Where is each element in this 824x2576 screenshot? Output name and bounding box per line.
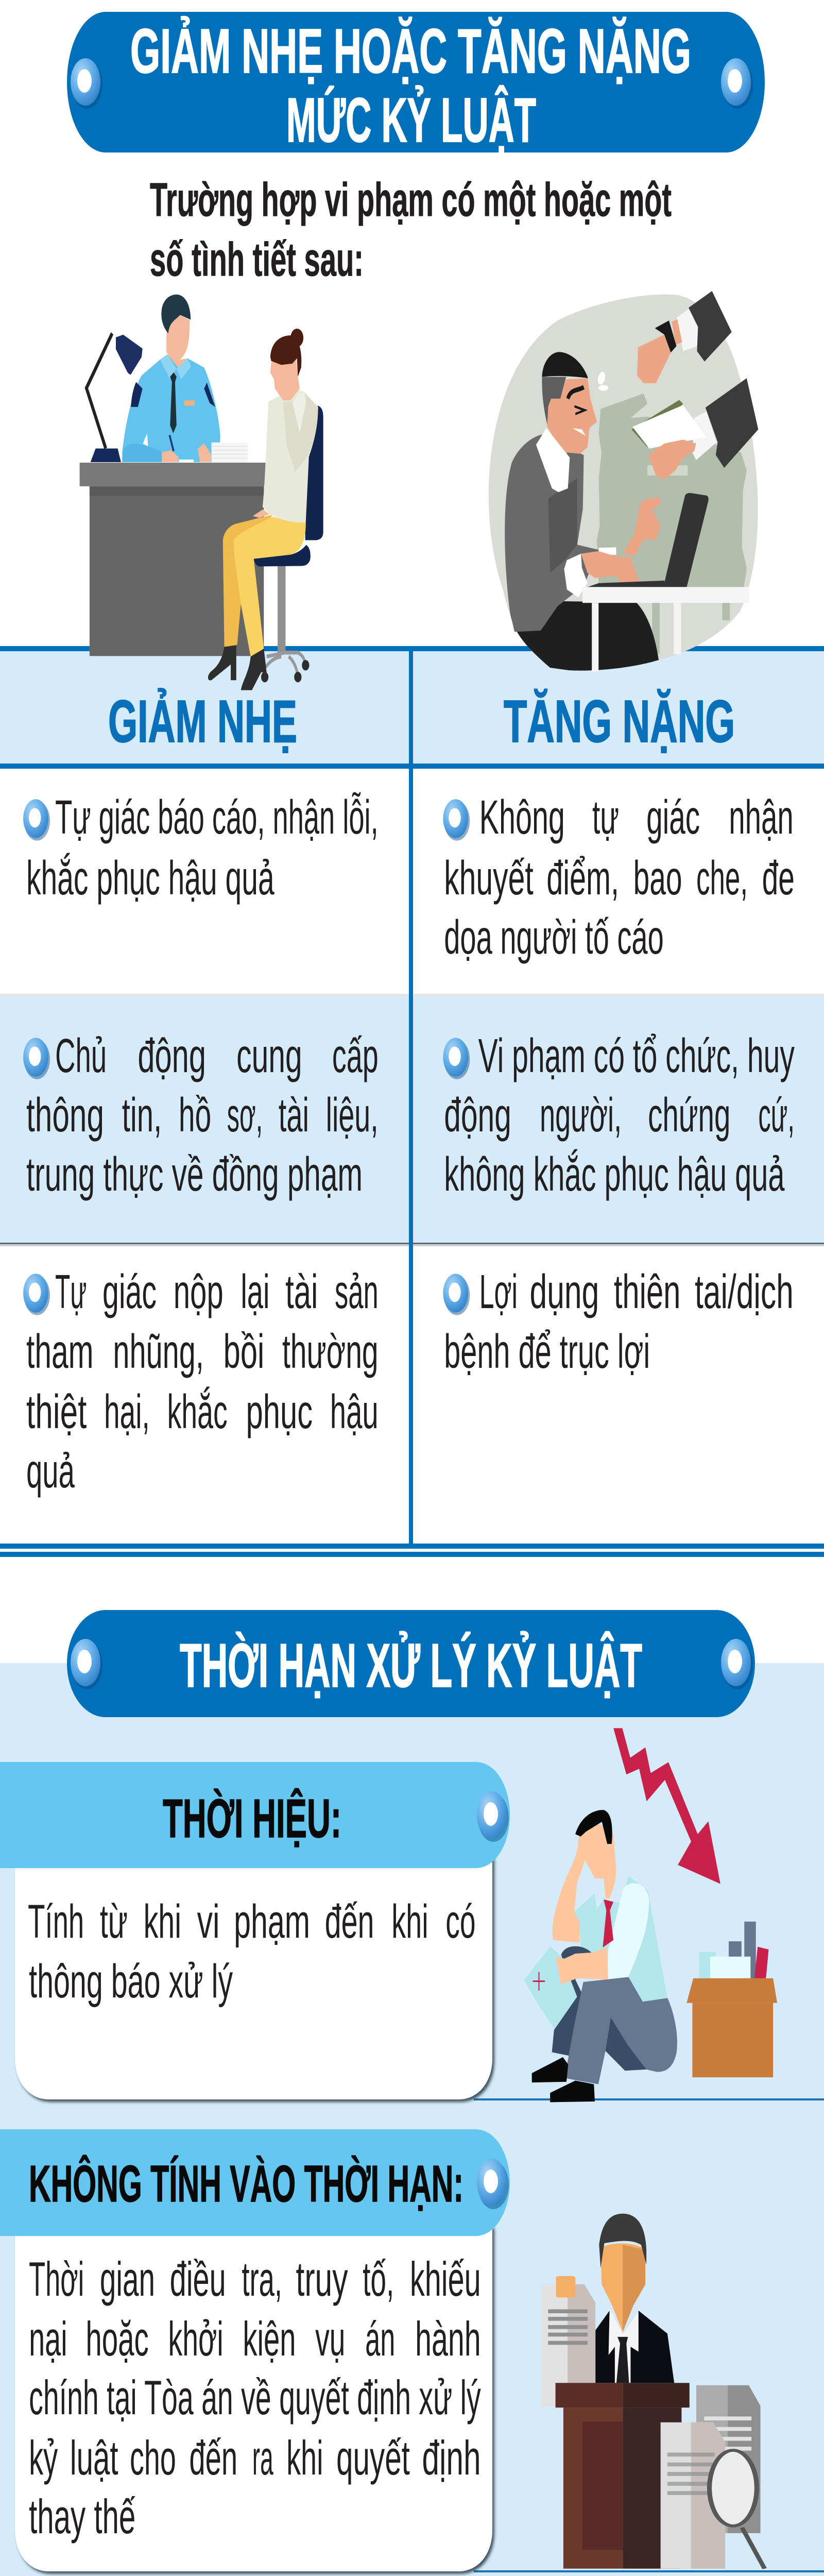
body text [28, 1895, 475, 2008]
cell: tăng nặng 1: Không [479, 790, 565, 844]
laptop [588, 493, 709, 587]
cell: giảm nhẹ 2: động [138, 1029, 206, 1082]
icon: right rivet [721, 58, 753, 109]
cell: giảm nhẹ 3: hại, [104, 1385, 150, 1438]
body text: định [422, 2431, 481, 2485]
body text: hoặc [85, 2312, 149, 2366]
illustration: officer and woman at desk [80, 295, 323, 690]
body text: khởi [168, 2312, 224, 2366]
cell: tăng nặng 2: người, [540, 1088, 622, 1142]
icon: rivet [477, 2159, 509, 2209]
falling arrow [613, 1728, 720, 1884]
intro text: số tình tiết sau: [150, 233, 364, 286]
icon: left rivet [71, 58, 102, 109]
body text: chính tại Tòa án về quyết định xử lý [29, 2371, 481, 2425]
cell: giảm nhẹ 3: nộp [174, 1265, 224, 1318]
background blob [489, 294, 758, 671]
cell: giảm nhẹ 3: hậu [330, 1385, 379, 1438]
cell: giảm nhẹ 3: thường [282, 1325, 379, 1378]
body text: thay thế [29, 2490, 135, 2544]
man [505, 352, 661, 671]
body text: cho [130, 2431, 176, 2485]
woman [208, 329, 318, 690]
cell: giảm nhẹ 2: tài [279, 1088, 309, 1142]
body text: khi [286, 2431, 323, 2485]
magnifier [710, 2450, 765, 2569]
cell: giảm nhẹ 2: thông [26, 1088, 104, 1142]
cell: giảm nhẹ 3: tham [26, 1325, 94, 1378]
cell: tăng nặng 3: bệnh để trục lợi [444, 1325, 650, 1378]
cell: giảm nhẹ 2: hồ [179, 1088, 211, 1142]
front document [661, 2422, 725, 2569]
cell: giảm nhẹ 3: Tự [55, 1265, 87, 1318]
body text: đến [325, 1895, 374, 1948]
body text: kiện [243, 2312, 296, 2366]
paper stack [212, 443, 248, 463]
cell: tăng nặng 1: bao [633, 851, 682, 905]
cell: tăng nặng 2 [443, 1029, 795, 1201]
green brush shape [597, 394, 747, 654]
label bar [0, 1762, 510, 1868]
section background: light blue [0, 1663, 824, 2576]
section 1 title banner [67, 12, 765, 155]
cell: giảm nhẹ 2: trung thực về đồng phạm [26, 1147, 363, 1201]
cell: tăng nặng 2: chứng [648, 1088, 730, 1142]
body text: nại [29, 2312, 67, 2366]
panel: thời hiệu [0, 1762, 510, 2099]
cell: giảm nhẹ 3: phục [246, 1385, 313, 1438]
illustration: stressed man pressured by hands [489, 291, 758, 672]
body text: tra, [242, 2252, 282, 2307]
cell: tăng nặng 1: đe [762, 851, 795, 905]
table cell text [23, 790, 795, 1498]
lamp [87, 333, 143, 462]
icon: left rivet [71, 1639, 102, 1689]
body text: phạm [234, 1895, 310, 1948]
body text: khi [144, 1895, 181, 1948]
cell: giảm nhẹ 1: Tự giác báo cáo, nhận lỗi, [55, 790, 379, 844]
body text: thông báo xử lý [29, 1955, 233, 2008]
cell: giảm nhẹ 3: thiệt [26, 1385, 87, 1438]
body text: điều [170, 2252, 226, 2307]
cell: giảm nhẹ 2: Chủ [55, 1029, 107, 1082]
title text [130, 15, 691, 155]
panel: comparison table [0, 646, 824, 1557]
cell: giảm nhẹ 2: sơ, [227, 1088, 263, 1142]
label bar [0, 2129, 510, 2236]
desk [80, 463, 266, 656]
body text: có [445, 1895, 475, 1948]
lower hand with documents [631, 378, 758, 479]
cell: tăng nặng 3: Lợi [479, 1265, 518, 1318]
card [15, 1855, 492, 2099]
title text: MỨC KỶ LUẬT [286, 85, 536, 155]
chair [254, 405, 323, 682]
label text: KHÔNG TÍNH VÀO THỜI HẠN: [29, 2155, 464, 2213]
icon: rivet [477, 1791, 509, 1842]
cell: giảm nhẹ 3: bồi [224, 1325, 264, 1378]
body text: quyết [336, 2431, 410, 2485]
cell: tăng nặng 3 [443, 1265, 794, 1378]
body text: ra [252, 2431, 273, 2485]
raised document [541, 2276, 595, 2406]
table header background [0, 647, 824, 766]
cell: tăng nặng 1: điểm, [546, 851, 619, 905]
illustration: man at podium with documents [541, 2214, 765, 2569]
body text: gian [100, 2252, 155, 2307]
body text: án [365, 2312, 395, 2366]
body text: khiếu [410, 2252, 481, 2307]
cell: giảm nhẹ 2: cung [236, 1029, 302, 1082]
cell: tăng nặng 3: thiên [614, 1265, 680, 1318]
cell: giảm nhẹ 3: lại [241, 1265, 269, 1318]
white desk [582, 587, 749, 672]
cell: giảm nhẹ 2: cấp [332, 1029, 379, 1082]
body text: luật [70, 2431, 118, 2485]
podium [556, 2383, 690, 2569]
body text: Tính [28, 1895, 84, 1948]
body text [29, 2252, 481, 2544]
label text: THỜI HIỆU: [163, 1788, 341, 1849]
cell: giảm nhẹ 3: quả [26, 1444, 75, 1498]
body text: vi [197, 1895, 220, 1948]
ground line 1 [474, 2098, 824, 2100]
ground line 2 [474, 2570, 824, 2572]
intro text [150, 174, 672, 286]
cell: giảm nhẹ 2: liệu, [326, 1088, 379, 1142]
row 2 background [0, 996, 824, 1243]
upper hand with watch [637, 291, 732, 383]
cell: giảm nhẹ 1: khắc phục hậu quả [26, 851, 274, 905]
map [524, 1946, 580, 2030]
cell: giảm nhẹ 3: tài [285, 1265, 318, 1318]
body text: từ [100, 1895, 128, 1948]
cell: giảm nhẹ 3: khắc [167, 1385, 228, 1438]
speaker [595, 2214, 674, 2383]
cell: tăng nặng 1: khuyết [444, 851, 534, 905]
illustration: man with falling arrow and box [524, 1728, 777, 2102]
heading: giảm nhẹ: GIẢM NHẸ [108, 688, 297, 755]
cell: tăng nặng 1: tự [592, 790, 619, 844]
body text: kỷ [29, 2431, 58, 2485]
box with files [686, 1922, 777, 2077]
section 2 title banner [67, 1610, 755, 1717]
man [532, 1810, 677, 2102]
panel: không tính vào thời hạn [0, 2129, 510, 2571]
body text: Thời [29, 2252, 84, 2307]
cell: tăng nặng 2: động [444, 1088, 511, 1142]
cell: giảm nhẹ 2: tin, [122, 1088, 162, 1142]
cell: tăng nặng 1 [443, 790, 795, 964]
officer [122, 295, 220, 463]
cell: tăng nặng 1: che, [696, 851, 748, 905]
cell: giảm nhẹ 3: giác [102, 1265, 157, 1318]
body text: hành [415, 2312, 481, 2366]
cell: giảm nhẹ 3: nhũng, [113, 1325, 204, 1378]
rear document [696, 2385, 761, 2533]
body text: đến [189, 2431, 237, 2485]
cell: tăng nặng 1: giác [646, 790, 700, 844]
cell: giảm nhẹ 1 [23, 790, 379, 905]
icon: right rivet [721, 1639, 753, 1689]
cell: tăng nặng 1: dọa người tố cáo [444, 910, 664, 964]
cell: giảm nhẹ 3 [23, 1265, 379, 1498]
body text: vụ [315, 2312, 345, 2366]
card [15, 2226, 492, 2571]
cell: giảm nhẹ 3: sản [335, 1265, 379, 1318]
body text: tố, [363, 2252, 394, 2307]
body text: truy [296, 2252, 348, 2307]
body text: khi [391, 1895, 428, 1948]
cell: giảm nhẹ 2 [23, 1029, 379, 1201]
cell: tăng nặng 3: dụng [530, 1265, 599, 1318]
